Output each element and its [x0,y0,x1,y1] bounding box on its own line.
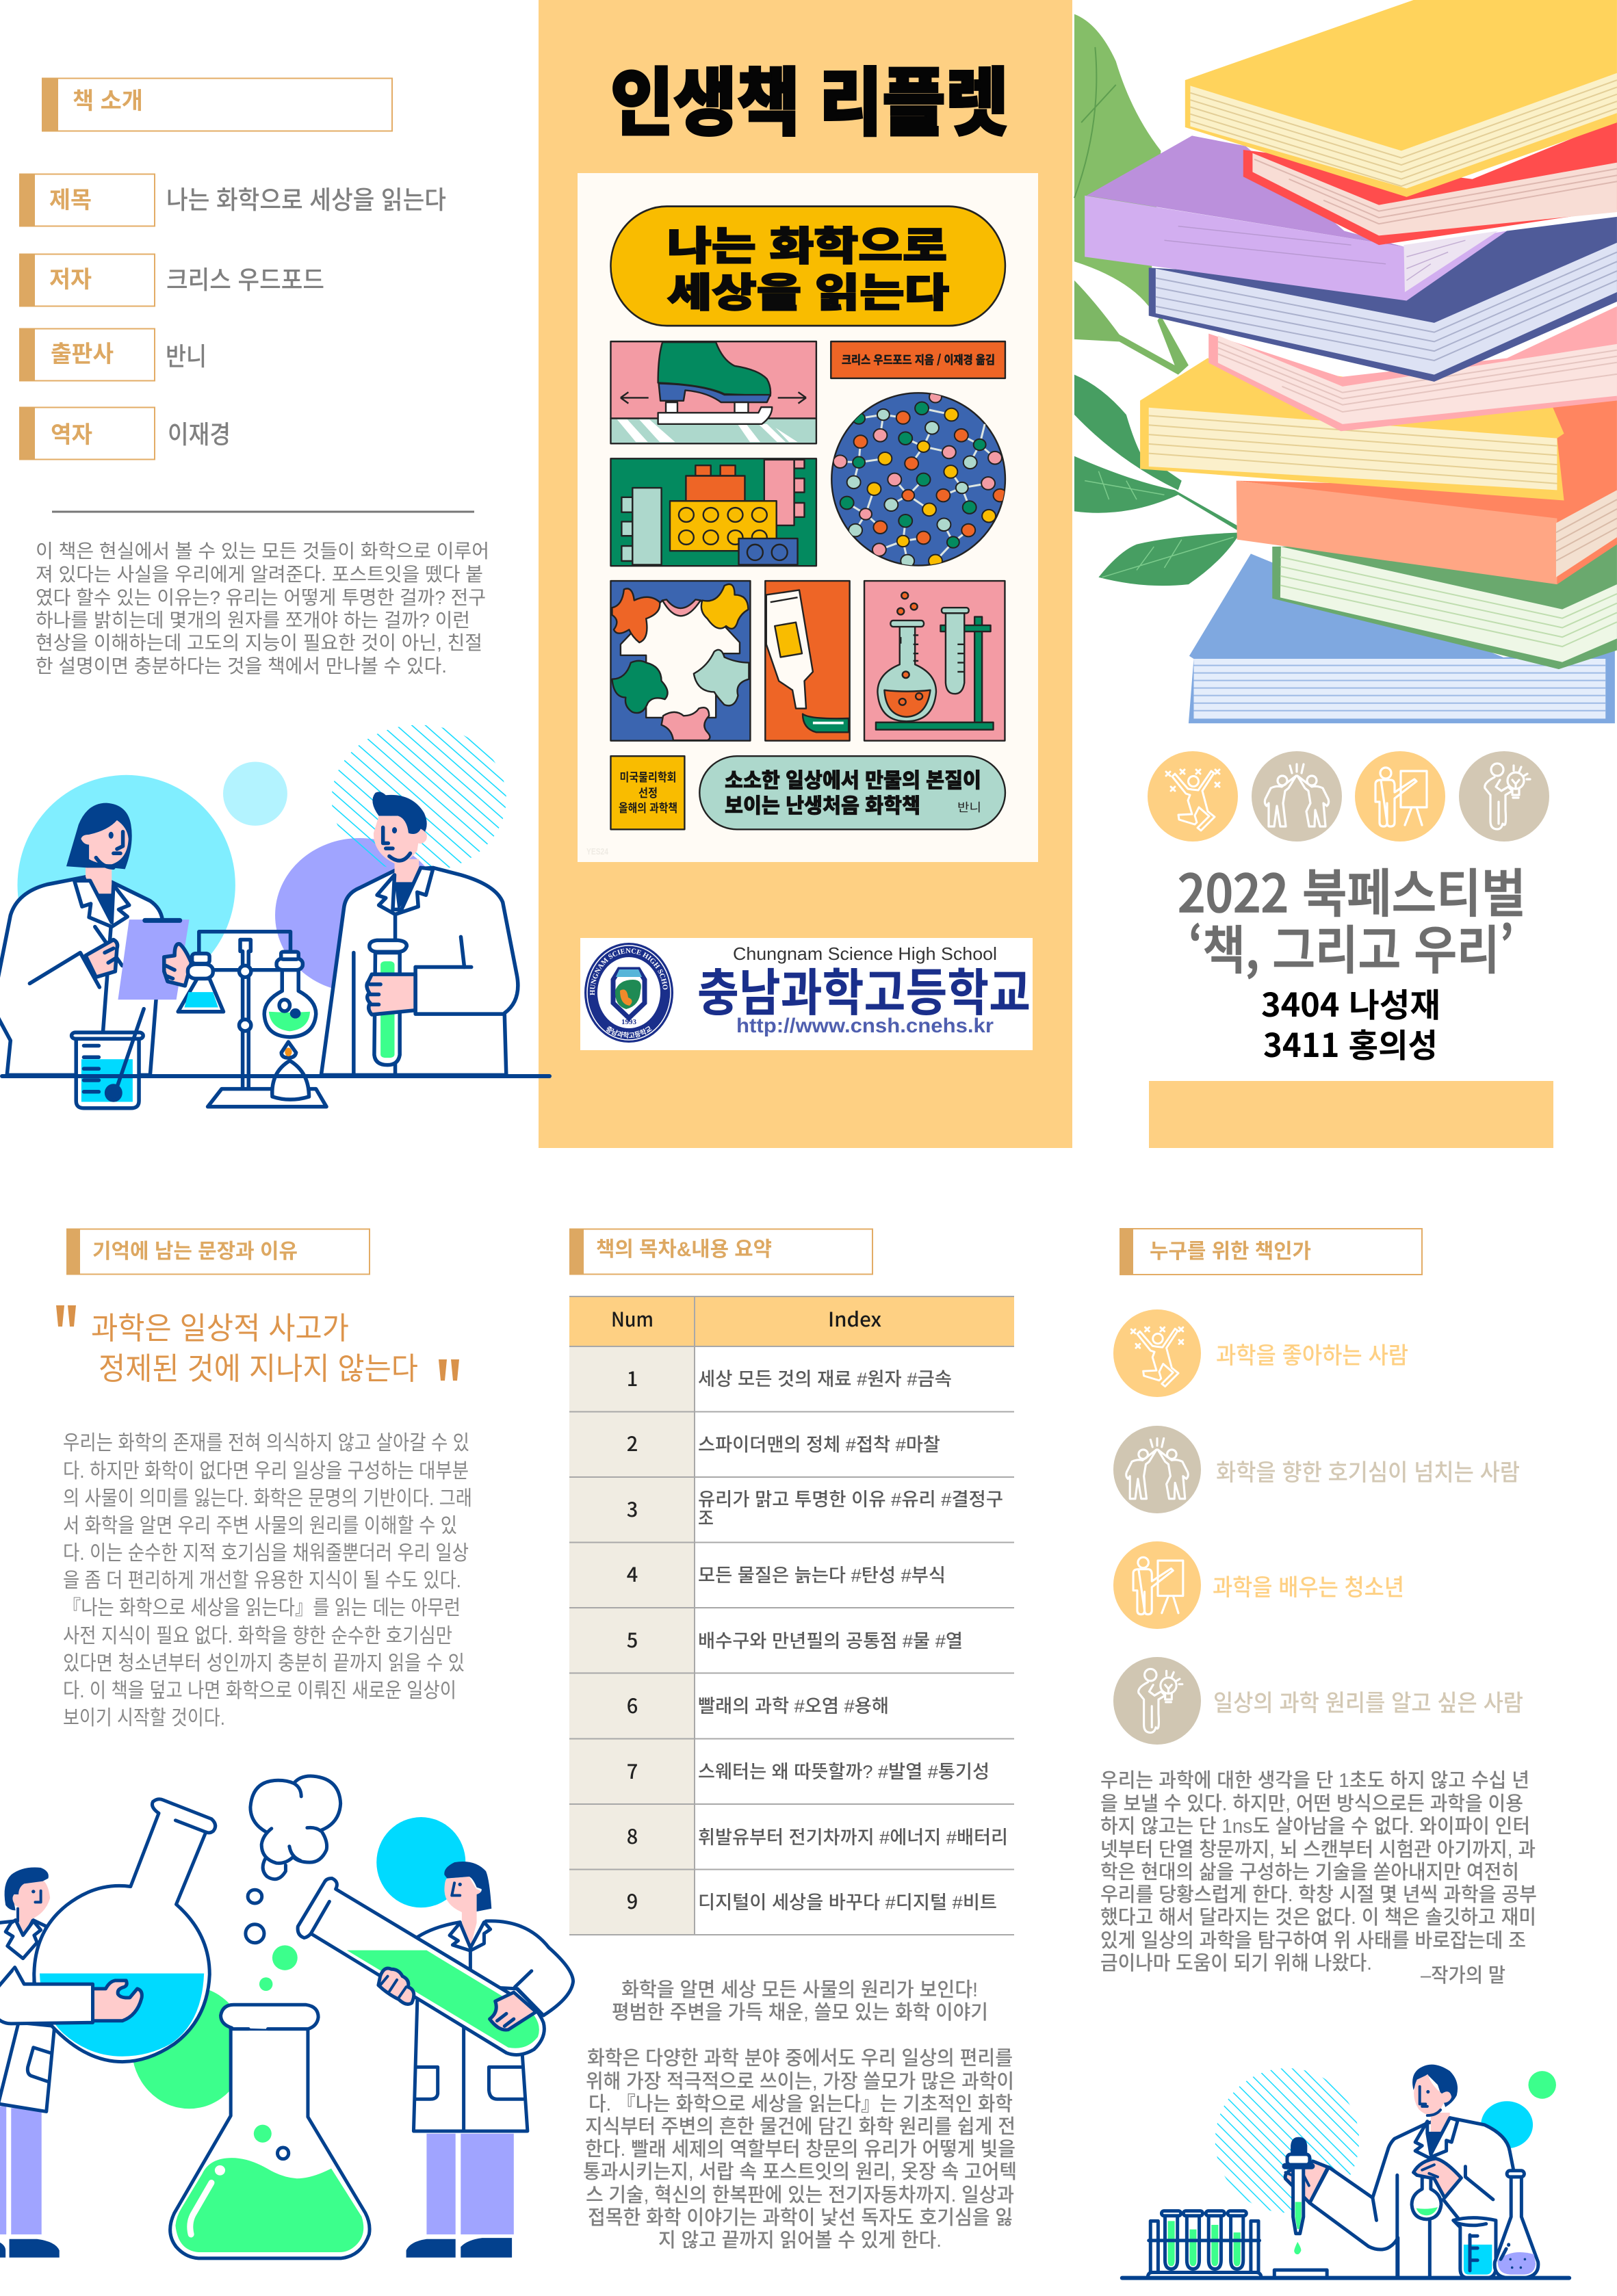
text block: book summary: 지 않고 끝까지 읽어볼 수 있게 한다. [658,2229,942,2252]
table row numbers [627,1364,638,1915]
text block: reason: 우리는 화학의 존재를 전혀 의식하지 않고 살아갈 수 있 [63,1432,469,1454]
text block: reason: 다. 이 책을 덮고 나면 화학으로 이뤄진 새로운 일상이 [63,1680,456,1702]
reader item: curious: 화학을 향한 호기심이 넘치는 사람 [1216,1460,1520,1486]
figure: bubbles and cloud [246,1776,341,1991]
book: pink [1208,306,1617,431]
school logo banner [580,938,1033,1050]
reader item: likes science: 과학을 좋아하는 사람 [1216,1343,1408,1369]
book: red [1243,120,1617,245]
table row text: 스웨터는 왜 따뜻할까? #발열 #통기성 [698,1762,989,1782]
table row text: 디지털이 세상을 바꾸다 #디지털 #비트 [698,1892,997,1913]
text block: author's note: 을 보낼 수 있다. 하지만, 어떤 방식으로든 과학을 이용 [1100,1792,1523,1815]
school seal: 1993 [621,1018,636,1026]
text block: book summary: 위해 가장 적극적으로 쓰이는, 가장 쓸모가 많은 과학이 [586,2070,1014,2093]
panel: book introduction [19,78,489,677]
text block: author's note: 금이나마 도움이 되기 위해 나왔다. [1100,1952,1372,1974]
table row numbers: 5 [627,1625,638,1654]
cover badge text: 선정 [638,783,658,800]
icon: presenter [1355,751,1445,842]
text block: reason: 서 화학을 알면 우리 주변 사물의 원리를 이해할 수 있 [63,1515,457,1537]
text block: book introduction: 하나를 밝히는데 몇개의 원자를 쪼개야 하는 걸까? 이런 [36,610,470,631]
label row: translator: 이재경 [168,421,231,449]
cover subtitle text: 소소한 일상에서 만물의 본질이 [725,764,981,794]
book: orange [1237,400,1617,584]
quote mark: opening [56,1305,76,1327]
text block: reason [63,1432,472,1730]
text block: book summary: 스 기술, 혁신의 한복판에 있는 전기자동차까지. 일상과 [586,2184,1014,2206]
text block: book summary: 통과시키는지, 서랍 속 포스트잇의 원리, 옷장 속 고어텍 [583,2161,1017,2183]
table row numbers: 1 [627,1364,638,1392]
text block: book introduction: 이 책은 현실에서 볼 수 있는 모든 것들이 화학으로 이루어 [36,540,489,562]
table row numbers: 2 [627,1429,638,1457]
panel: table of contents [569,1229,1017,2252]
title: 인생책 리플렛: 인생책 리플렛 [610,44,1009,151]
cover badge text [619,768,677,816]
label row: author [19,254,324,306]
text block: tagline: 평범한 주변을 가득 채운, 쓸모 있는 화학 이야기 [612,2001,988,2024]
text block: reason: 있다면 청소년부터 성인까지 충분히 끝까지 읽을 수 있 [63,1652,465,1675]
book: green [1272,542,1617,669]
reader item: teens: 과학을 배우는 청소년 [1213,1575,1404,1601]
icon: high five [1252,751,1342,842]
cover author label: 크리스 우드포드 지음 / 이재경 옮김 [842,350,995,367]
text block: book summary: 한다. 빨래 세제의 역할부터 창문의 유리가 어떻게 빛을 [585,2138,1016,2161]
event title: ‘책, 그리고 우리’ [1189,909,1514,984]
school seal: CHUNGNAM SCIENCE HIGH SCHOOL [590,948,668,995]
student names [1261,978,1440,1067]
label row: author: 크리스 우드포드 [166,266,324,294]
illustration: stack of books and leaves [1074,0,1617,723]
figure: right scientist with test tube [298,1862,573,2258]
table header [611,1304,881,1333]
text block: reason: 다. 이는 순수한 지적 호기심을 채워줄뿐더러 우리 일상 [63,1542,469,1565]
quote mark: closing [439,1359,459,1381]
event title: 2022 북페스티벌 [1178,852,1526,927]
text block: author's note: 우리는 과학에 대한 생각을 단 1초도 하지 않고 수십 년 [1100,1769,1529,1792]
label row: translator: 역자 [51,422,92,448]
text block: author's note [1100,1769,1537,1974]
school English name: Chungnam Science High School [733,943,997,964]
text block: author's note: 하지 않고는 단 1ns도 살아남을 수 없다. 와이파이 인터 [1100,1815,1530,1838]
school URL: http://www.cnsh.cnehs.kr [736,1015,994,1037]
cover title text: 세상을 읽는다 [667,261,949,318]
school seal: 충남과학고등학교 [606,1026,652,1039]
table row text: 모든 물질은 늙는다 #탄성 #부식 [698,1565,946,1586]
icon row [1148,751,1549,842]
illustration: scientist with dropper and flasks [1120,2065,1571,2280]
contents table [569,1296,1014,1935]
text block: book introduction [36,540,489,677]
table row text: 유리가 맑고 투명한 이유 #유리 #결정구 [698,1489,1003,1510]
table row numbers: 4 [627,1559,638,1588]
label row: publisher [19,328,207,381]
text block: book introduction: 져 있다는 사실을 우리에게 알려준다. 포스트잇을 뗐다 붙 [36,564,483,585]
book: purple [1085,135,1507,300]
panel: memorable sentence [56,1229,472,1730]
cover art: shirt, tube, flask [610,581,1005,829]
text block: book summary: 접목한 화학 이야기는 과학이 낯선 독자도 호기심을 잃 [588,2206,1013,2229]
quote text [91,1303,418,1388]
reader item: teens [1113,1541,1404,1629]
leaves [1074,14,1241,586]
table row text: 조 [698,1509,714,1529]
book: yellow middle [1140,358,1564,501]
book cover [578,173,1038,862]
label row: author: 저자 [49,267,92,293]
illustration: scientists with giant flasks [0,1776,573,2258]
reader item: everyday science [1113,1657,1523,1745]
school seal [584,943,673,1043]
label row: publisher: 반니 [166,343,207,371]
text block: book introduction: 한 설명이면 충분하다는 것을 책에서 만나볼 수 있다. [36,655,447,677]
table header: Num [611,1304,654,1333]
figure: erlenmeyer flask [170,2005,370,2258]
heading: memorable sentence [66,1229,370,1275]
student names: 3411 홍의성 [1263,1019,1438,1067]
table row numbers: 9 [627,1886,638,1915]
reader item: everyday science: 일상의 과학 원리를 알고 싶은 사람 [1213,1691,1523,1717]
label row: translator [19,407,231,460]
label row: title: 제목 [49,187,92,213]
cover subtitle text: 보이는 난생처음 화학책 [725,789,920,819]
heading: memorable sentence: 기억에 남는 문장과 이유 [92,1240,298,1263]
table row text [698,1369,1008,1913]
text block: reason: 보이기 시작할 것이다. [63,1707,225,1730]
table row text: 배수구와 만년필의 공통점 #물 #열 [698,1631,963,1652]
book: navy [1149,217,1617,382]
heading: contents: 책의 목차&내용 요약 [596,1238,772,1261]
school Korean name: 충남과학고등학교 [697,952,1031,1026]
heading: contents [569,1229,872,1275]
table row text: 스파이더맨의 정체 #접착 #마찰 [698,1435,940,1455]
cover badge text: 올해의 과학책 [619,798,677,816]
text block: book summary: 지식부터 주변의 흔한 물건에 담긴 화학 원리를 쉽게 전 [585,2115,1016,2138]
book: yellow top [1185,0,1617,197]
table row text: 휘발유부터 전기차까지 #에너지 #배터리 [698,1827,1008,1848]
text block: book summary: 화학은 다양한 과학 분야 중에서도 우리 일상의 편리를 [587,2047,1013,2070]
text block: author's note: 있게 일상의 과학을 탐구하여 위 사태를 바로잡는데 조 [1100,1929,1526,1952]
text block: tagline: 화학을 알면 세상 모든 사물의 원리가 보인다! [621,1979,978,2001]
table line of lab bench [0,1074,552,1078]
figure: woman scientist [0,803,192,1075]
text block: author's note: 넷부터 단열 창문까지, 뇌 스캔부터 시험관 아기까지, 과 [1100,1838,1536,1861]
cover subtitle text [725,764,981,819]
table row numbers: 3 [627,1494,638,1523]
label row: title [19,174,446,226]
panel: orange centre column background [539,0,1072,1148]
text block: author's note: 했다고 해서 달라지는 것은 없다. 이 책은 솔깃하고 재미 [1100,1906,1536,1929]
text block: book introduction: 였다 할수 있는 이유는? 유리는 어떻게 투명한 걸까? 전구 [36,587,486,608]
figure: beaker with stirrer [72,1009,144,1108]
cover watermark: YES24 [586,846,609,857]
figure: scientist [1274,2065,1514,2278]
figure: round-bottom flask [0,1799,216,2062]
heading: target readers [1120,1228,1422,1275]
table row text: 빨래의 과학 #오염 #용해 [698,1696,889,1717]
text block: author's note: 우리를 당황스럽게 한다. 학창 시절 몇 년씩 과학을 공부 [1100,1883,1537,1906]
figure: conical flask [1495,2171,1538,2278]
event title [1178,852,1526,984]
table row numbers: 6 [627,1691,638,1719]
figure: distillation apparatus [178,932,326,1107]
text block: book summary [583,2047,1017,2252]
text block: tagline [612,1979,988,2024]
cover title pill [610,207,1005,326]
reader item: curious [1113,1426,1520,1513]
figure: man scientist with test tube [321,792,518,1075]
table row numbers: 7 [627,1756,638,1785]
text block: book introduction: 현상을 이해하는데 고도의 지능이 필요한 것이 아닌, 친절 [36,632,482,653]
illustration: two scientists at the lab bench [0,712,635,1108]
text block: reason: 사전 지식이 필요 없다. 화학을 향한 순수한 호기심만 [63,1625,452,1647]
cover title text [667,214,949,318]
table header: Index [828,1304,881,1333]
table row numbers: 8 [627,1821,638,1850]
label row: title: 나는 화학으로 세상을 읽는다 [166,186,446,214]
heading: target readers: 누구를 위한 책인가 [1150,1240,1311,1263]
heading: book introduction [42,78,392,131]
text block: reason: 다. 하지만 화학이 없다면 우리 일상을 구성하는 대부분 [63,1460,469,1483]
icon: jumping person [1148,751,1238,842]
text block: reason: 『나는 화학으로 세상을 읽는다』를 읽는 데는 아무런 [63,1597,461,1619]
reader item: likes science [1113,1309,1408,1397]
attribution: –작가의 말 [1421,1965,1505,1987]
cover publisher: 반니 [957,798,981,815]
table row text: 세상 모든 것의 재료 #원자 #금속 [698,1369,952,1390]
quote text: 정제된 것에 지나지 않는다 [99,1344,418,1388]
panel: target readers [1100,1228,1537,1987]
figure: beaker [1453,2218,1496,2278]
orange footer block [1149,1081,1553,1148]
cover art: skate, lego, molecules [610,341,1007,567]
text block: reason: 의 사물이 의미를 잃는다. 화학은 문명의 기반이다. 그래 [63,1487,472,1510]
cover badge text: 미국물리학회 [620,768,676,785]
icon: idea [1459,751,1549,842]
figure: left scientist [0,1868,60,2258]
book: blue [1189,553,1615,723]
text block: book summary: 다. 『나는 화학으로 세상을 읽는다』는 기초적인 화학 [588,2093,1013,2115]
text block: author's note: 학은 현대의 삶을 구성하는 기술을 쏟아내지만 여전히 [1100,1861,1519,1883]
label row: publisher: 출판사 [51,341,114,367]
cover title text: 나는 화학으로 [667,214,947,272]
heading: book introduction: 책 소개 [73,88,143,114]
quote text: 과학은 일상적 사고가 [91,1303,349,1348]
student names: 3404 나성재 [1261,978,1440,1026]
figure: test tube rack [1148,2211,1261,2278]
text block: reason: 을 좀 더 편리하게 개선할 유용한 지식이 될 수도 있다. [63,1569,461,1592]
